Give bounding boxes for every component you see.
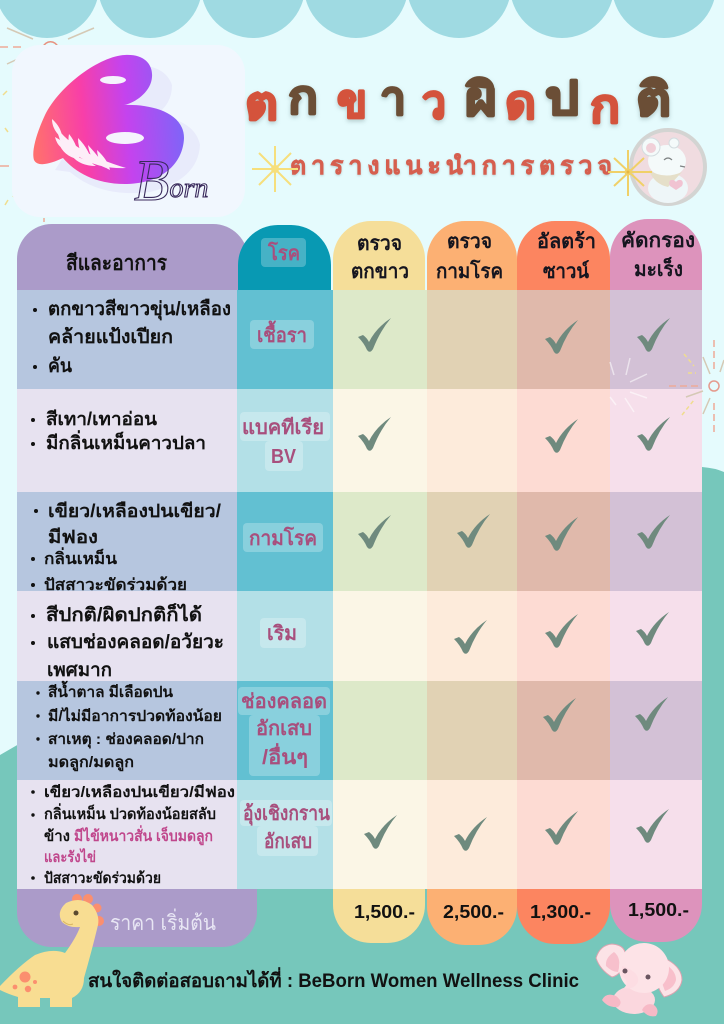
table body cells <box>17 290 702 889</box>
symptoms: bacterial: สีเทา/เทาอ่อน <box>46 409 158 429</box>
price: STD test <box>427 889 517 945</box>
price label: ราคา เริ่มต้น <box>110 908 216 935</box>
disease: yeast <box>250 320 314 349</box>
row: STD <box>17 492 702 591</box>
firework decoration: right <box>610 340 724 432</box>
sparkle left <box>252 146 298 192</box>
check marks <box>358 318 670 851</box>
logo holes <box>100 76 144 144</box>
disease: STD <box>243 523 323 552</box>
symptoms column text <box>31 298 235 887</box>
disease: vaginitis <box>238 687 330 776</box>
symptoms: PID: กลิ่นเหม็น ปวดท้องน้อยสลับ <box>44 803 216 823</box>
row: bacterial <box>17 389 702 492</box>
disease: PID: อุ้งเชิงกราน <box>243 802 330 826</box>
symptoms: herpes: เพศมาก <box>47 660 112 681</box>
teal hill background <box>0 466 724 1024</box>
symptoms: vaginitis: มี/ไม่มีอาการปวดท้องน้อย <box>48 706 222 725</box>
title: ว <box>422 76 446 128</box>
header: symptoms <box>17 224 248 290</box>
disease: herpes: เริม <box>267 623 297 645</box>
title: ติ <box>636 73 671 125</box>
symptoms: STD: กลิ่นเหม็น <box>44 547 117 568</box>
symptoms: PID: มีไข้หนาวสั่น เจ็บมดลูก <box>74 825 213 846</box>
sparkle right <box>608 150 652 196</box>
price: ultrasound: 1,300.- <box>530 902 591 922</box>
logo panel <box>12 45 245 217</box>
header: ultrasound: อัลตร้า <box>537 230 596 253</box>
symptoms: bacterial <box>31 409 206 453</box>
mouse mascot badge <box>631 130 705 204</box>
symptoms: STD: ปัสสาวะขัดร่วมด้วย <box>44 576 187 594</box>
logo script word Born: B <box>134 148 169 213</box>
price: STD test: 2,500.- <box>443 902 504 922</box>
dinosaur mascot <box>0 894 104 1007</box>
header: STD test: กามโรค <box>436 259 503 283</box>
header: ultrasound: ซาวน์ <box>543 260 589 283</box>
title: ข <box>337 75 367 127</box>
symptoms: yeast: ตกขาวสีขาวขุ่น/เหลือง <box>48 298 231 321</box>
symptoms: STD: มีฟอง <box>48 527 98 547</box>
symptoms: herpes <box>31 602 224 681</box>
row: herpes <box>17 591 702 681</box>
symptoms: PID: ข้าง <box>44 828 70 845</box>
symptoms: vaginitis <box>36 680 222 772</box>
symptoms: PID <box>31 784 235 887</box>
title <box>245 71 671 132</box>
disease: PID <box>240 800 332 856</box>
title: ก <box>590 80 620 132</box>
disease: vaginitis: /อื่นๆ <box>262 742 308 769</box>
price: cancer screening: 1,500.- <box>628 900 689 920</box>
logo B shadow <box>55 65 200 193</box>
symptoms: yeast <box>33 298 231 377</box>
price: cancer screening <box>610 889 702 942</box>
symptoms: STD <box>31 501 221 594</box>
title: ผิ <box>465 73 497 125</box>
contact line: สนใจติดต่อสอบถามได้ที่ : BeBorn Women Wellness Clinic <box>88 967 579 992</box>
disease: bacterial BV <box>240 412 330 471</box>
header row <box>17 219 702 290</box>
title: ป <box>545 72 579 124</box>
subtitle: ตารางแนะนำการตรวจ <box>290 152 612 180</box>
disease column labels <box>238 320 332 856</box>
symptoms: vaginitis: สาเหตุ : ช่องคลอด/ปาก <box>48 731 204 749</box>
header: STD test: ตรวจ <box>447 231 492 253</box>
symptoms: herpes: แสบช่องคลอด/อวัยวะ <box>47 632 224 653</box>
row: PID <box>17 780 702 889</box>
price: discharge test: 1,500.- <box>354 902 415 922</box>
header: disease: โรค <box>267 241 300 265</box>
disease: STD: กามโรค <box>249 526 317 550</box>
logo wheat sprig <box>52 119 126 170</box>
header: discharge test: ตรวจ <box>357 233 402 255</box>
row: yeast <box>17 290 702 389</box>
header: discharge test: ตกขาว <box>351 261 409 283</box>
title: า <box>380 72 406 124</box>
symptoms: PID: เขียว/เหลืองปนเขียว/มีฟอง <box>44 784 235 801</box>
price row <box>17 889 702 947</box>
scalloped top border <box>0 0 716 38</box>
header: ultrasound <box>517 221 610 290</box>
price: discharge test <box>333 889 425 943</box>
logo B mark <box>33 55 184 184</box>
header: STD test <box>427 221 517 290</box>
price: ultrasound <box>517 889 610 944</box>
symptoms: vaginitis: สีน้ำตาล มีเลือดปน <box>48 680 174 701</box>
disease: vaginitis: อักเสบ <box>256 718 312 740</box>
title: ต <box>245 77 278 129</box>
header: cancer screening: คัดกรอง <box>621 230 695 252</box>
symptoms: herpes: สีปกติ/ผิดปกติก็ได้ <box>46 602 202 626</box>
header: discharge test <box>333 221 425 290</box>
header: cancer screening: มะเร็ง <box>634 256 683 281</box>
symptoms: PID: ปัสสาวะขัดร่วมด้วย <box>44 870 161 887</box>
logo script word Born: orn <box>169 173 208 204</box>
symptoms: yeast: คัน <box>48 356 72 377</box>
symptoms: PID: และรังไข่ <box>44 847 96 866</box>
disease: yeast: เชื้อรา <box>257 320 307 347</box>
header: disease <box>238 225 331 290</box>
symptoms: vaginitis: มดลูก/มดลูก <box>48 754 134 772</box>
disease: bacterial BV: แบคทีเรีย <box>242 416 324 439</box>
disease: PID: อักเสบ <box>264 831 312 853</box>
symptoms: bacterial: มีกลิ่นเหม็นคาวปลา <box>46 430 206 453</box>
disease: vaginitis: ช่องคลอด <box>241 691 327 713</box>
mouse body <box>642 138 688 203</box>
elephant mascot <box>596 943 682 1016</box>
title: ด <box>505 76 536 128</box>
title: ก <box>288 71 318 123</box>
disease: bacterial BV: BV <box>271 446 297 468</box>
price label <box>17 889 257 947</box>
symptoms: yeast: คล้ายแป้งเปียก <box>48 326 173 348</box>
firework decoration: top left <box>0 28 120 222</box>
header: symptoms: สีและอาการ <box>66 251 168 275</box>
disease: herpes <box>260 618 306 648</box>
header: cancer screening <box>610 219 702 290</box>
row: vaginitis <box>17 681 702 780</box>
symptoms: STD: เขียว/เหลืองปนเขียว/ <box>48 501 221 521</box>
